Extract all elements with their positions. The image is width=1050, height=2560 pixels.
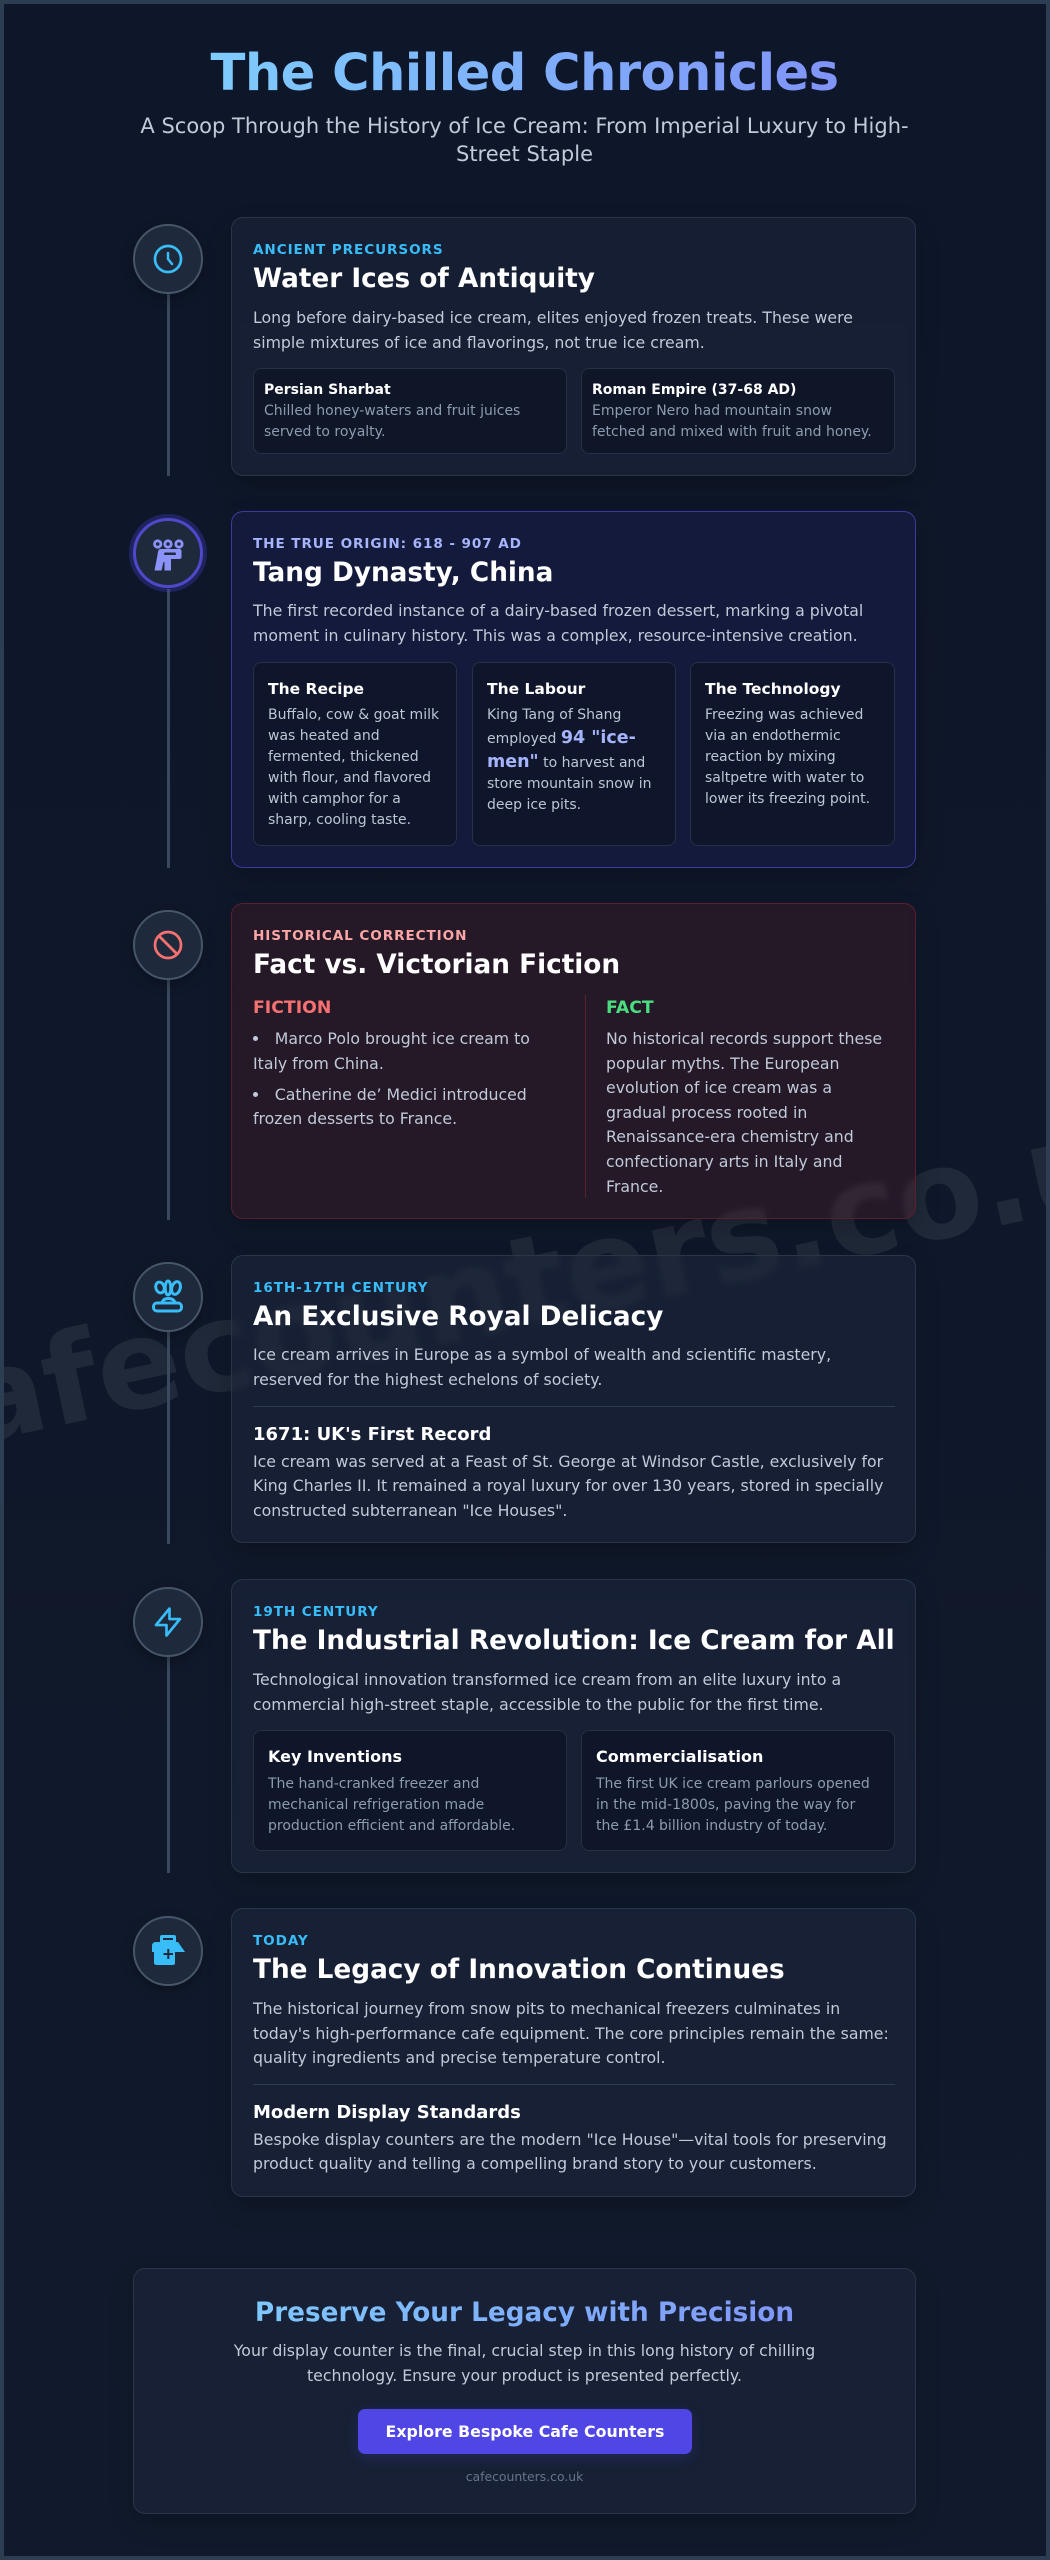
- panel: call to action: [133, 2268, 916, 2514]
- sub-card: Key Inventions: mechanical refrigeration made: [268, 1796, 484, 1812]
- sub-card: Commercialisation: [581, 1730, 895, 1851]
- sub-card: Commercialisation: in the mid-1800s, paving the way for: [596, 1796, 855, 1812]
- subtitle: A Scoop Through the History of Ice Cream: From Imperial Luxury to High-: [140, 114, 909, 138]
- description: moment in culinary history. This was a complex, resource-intensive creation.: [253, 626, 858, 645]
- icon: ice-men: [133, 518, 203, 588]
- heading: The Industrial Revolution: Ice Cream for All: [253, 1626, 895, 1656]
- sub-card: Roman Empire: Roman Empire (37-68 AD): [592, 382, 796, 398]
- sub-card: Roman Empire: Emperor Nero had mountain snow: [592, 403, 832, 419]
- heading: Fact vs. Victorian Fiction: [253, 950, 620, 980]
- fiction heading: FICTION: [253, 998, 331, 1018]
- fact text: evolution of ice cream was a: [606, 1078, 832, 1097]
- description: Ice cream arrives in Europe as a symbol of wealth and scientific mastery,: [253, 1345, 831, 1364]
- panel: industrial revolution: [231, 1579, 916, 1873]
- description: [252, 1999, 889, 2067]
- heading: The Legacy of Innovation Continues: [253, 1955, 785, 1985]
- sub-card: The Labour: [472, 662, 676, 846]
- sub-card: The Recipe: fermented, thickened: [268, 749, 419, 765]
- title: The Chilled Chronicles: [210, 43, 838, 103]
- cta button: [358, 2409, 692, 2454]
- footer url: cafecounters.co.uk: [466, 2469, 583, 2484]
- sub-card: The Recipe: [253, 662, 457, 846]
- timeline connector 2: [166, 589, 170, 868]
- fiction list: Marco Polo brought ice cream to: [275, 1029, 530, 1048]
- sub-card: The Labour: men" to harvest and: [487, 752, 645, 772]
- fiction list: [253, 1029, 530, 1128]
- description: today's high-performance cafe equipment. The core principles remain the same:: [253, 2024, 889, 2043]
- sub-card: Commercialisation: the £1.4 billion industry of today.: [596, 1818, 827, 1834]
- fact text: Renaissance-era chemistry and: [606, 1127, 854, 1146]
- heading: Water Ices of Antiquity: [253, 264, 595, 294]
- sub-card: Roman Empire: fetched and mixed with fruit and honey.: [592, 424, 872, 440]
- display text: Bespoke display counters are the modern "Ice House"—vital tools for preserving: [253, 2130, 887, 2149]
- panel: royal delicacy: [231, 1255, 916, 1543]
- sub-card: Commercialisation: The first UK ice cream parlours opened: [596, 1776, 870, 1792]
- icon: lightning bolt: [133, 1587, 203, 1657]
- heading: Tang Dynasty, China: [253, 558, 553, 588]
- subtitle: Street Staple: [456, 142, 593, 166]
- description: Long before dairy-based ice cream, elites enjoyed frozen treats. These were: [253, 308, 853, 327]
- sub-card: The Technology: via an endothermic: [705, 728, 841, 744]
- description: The historical journey from snow pits to mechanical freezers culminates in: [253, 1999, 840, 2018]
- sub-card: Roman Empire: [581, 368, 895, 454]
- sub-card: The Labour: store mountain snow in: [487, 776, 652, 792]
- icon: toolbox: [133, 1916, 203, 1986]
- sub-card: Persian Sharbat: served to royalty.: [264, 424, 385, 440]
- sub-card: Commercialisation: Commercialisation: [596, 1747, 763, 1766]
- sub-card: Persian Sharbat: Persian Sharbat: [264, 382, 391, 398]
- panel: water ices: [231, 217, 916, 476]
- description: [252, 1670, 841, 1714]
- era label: 19TH CENTURY: [253, 1604, 379, 1620]
- sub-card: Key Inventions: Key Inventions: [268, 1747, 402, 1766]
- era label: HISTORICAL CORRECTION: [253, 928, 467, 944]
- panel: Tang Dynasty: [231, 511, 916, 868]
- fact text: popular myths. The European: [606, 1054, 839, 1073]
- fiction list: Italy from China.: [253, 1054, 384, 1073]
- cta text: Your display counter is the final, crucial step in this long history of chilling: [234, 2341, 815, 2360]
- display text: product quality and telling a compelling brand story to your customers.: [253, 2154, 817, 2173]
- subtitle: [140, 114, 909, 166]
- fiction list: Catherine de’ Medici introduced: [275, 1085, 527, 1104]
- fact text: [606, 1029, 882, 1196]
- fiction list: frozen desserts to France.: [253, 1109, 457, 1128]
- description: [253, 308, 853, 352]
- sub-card: The Recipe: was heated and: [268, 728, 380, 744]
- timeline connector 3: [166, 980, 170, 1220]
- description: [253, 1345, 831, 1389]
- timeline connector 4: [166, 1332, 170, 1544]
- sub-card: The Labour: employed 94 "ice-: [487, 728, 636, 748]
- description: Technological innovation transformed ice cream from an elite luxury into a: [253, 1670, 841, 1689]
- fact text: confectionary arts in Italy and: [606, 1152, 842, 1171]
- sub-card: The Technology: The Technology: [705, 680, 841, 698]
- fact text: France.: [606, 1177, 663, 1196]
- cta heading: [133, 2295, 916, 2331]
- sub-card: Key Inventions: [253, 1730, 567, 1851]
- description: quality ingredients and precise temperature control.: [253, 2048, 666, 2067]
- panel: fact vs fiction: [231, 903, 916, 1219]
- timeline connector 1: [166, 293, 170, 476]
- timeline connector 5: [166, 1656, 170, 1873]
- heading: An Exclusive Royal Delicacy: [253, 1302, 663, 1332]
- era label: THE TRUE ORIGIN: 618 - 907 AD: [253, 536, 522, 552]
- era label: 16TH-17TH CENTURY: [253, 1280, 428, 1296]
- sub-card: Key Inventions: The hand-cranked freezer and: [268, 1776, 479, 1792]
- fact text: gradual process rooted in: [606, 1103, 807, 1122]
- sub-card: Key Inventions: production efficient and affordable.: [268, 1818, 515, 1834]
- sub-card: Persian Sharbat: Chilled honey-waters and fruit juices: [264, 403, 520, 419]
- sub-heading: Modern Display Standards: [253, 2102, 521, 2122]
- era label: TODAY: [253, 1933, 309, 1949]
- cta button: Explore Bespoke Cafe Counters: [386, 2422, 664, 2441]
- sub-card: The Recipe: The Recipe: [268, 680, 364, 698]
- description: reserved for the highest echelons of society.: [253, 1370, 602, 1389]
- description: [252, 601, 863, 645]
- sub-card: The Recipe: sharp, cooling taste.: [268, 812, 411, 828]
- record text: constructed subterranean "Ice Houses".: [253, 1501, 567, 1520]
- era label: ANCIENT PRECURSORS: [253, 242, 444, 258]
- sub-card: The Recipe: Buffalo, cow & goat milk: [268, 707, 439, 723]
- sub-card: The Technology: [690, 662, 895, 846]
- sub-card: The Recipe: with flour, and flavored: [268, 770, 431, 786]
- sub-card: Persian Sharbat: [253, 368, 567, 454]
- record text: King Charles II. It remained a royal luxury for over 130 years, stored in specially: [253, 1476, 883, 1495]
- sub-card: The Labour: King Tang of Shang: [487, 707, 621, 723]
- description: The first recorded instance of a dairy-based frozen dessert, marking a pivotal: [253, 601, 863, 620]
- description: commercial high-street staple, accessible to the public for the first time.: [253, 1695, 824, 1714]
- record text: [253, 1452, 884, 1520]
- panel: legacy today: [231, 1908, 916, 2197]
- sub-card: The Technology: Freezing was achieved: [705, 707, 863, 723]
- sub-card: The Technology: saltpetre with water to: [705, 770, 864, 786]
- cta heading: Preserve Your Legacy with Precision: [255, 2298, 794, 2328]
- record text: Ice cream was served at a Feast of St. George at Windsor Castle, exclusively for: [253, 1452, 883, 1471]
- cta text: [234, 2341, 815, 2385]
- icon: prohibited: [133, 910, 203, 980]
- display text: [253, 2130, 887, 2173]
- sub-card: The Recipe: with camphor for a: [268, 791, 401, 807]
- fact heading: FACT: [606, 998, 654, 1018]
- sub-card: The Labour: deep ice pits.: [487, 797, 581, 813]
- fact text: No historical records support these: [606, 1029, 882, 1048]
- sub-card: The Labour: The Labour: [487, 680, 585, 698]
- icon: crown: [133, 1262, 203, 1332]
- icon: clock: [133, 224, 203, 294]
- sub-card: The Technology: reaction by mixing: [705, 749, 836, 765]
- description: simple mixtures of ice and flavorings, not true ice cream.: [253, 333, 705, 352]
- sub-card: The Technology: lower its freezing point.: [705, 791, 870, 807]
- sub-heading: 1671: UK's First Record: [253, 1424, 491, 1444]
- cta text: technology. Ensure your product is presented perfectly.: [307, 2366, 742, 2385]
